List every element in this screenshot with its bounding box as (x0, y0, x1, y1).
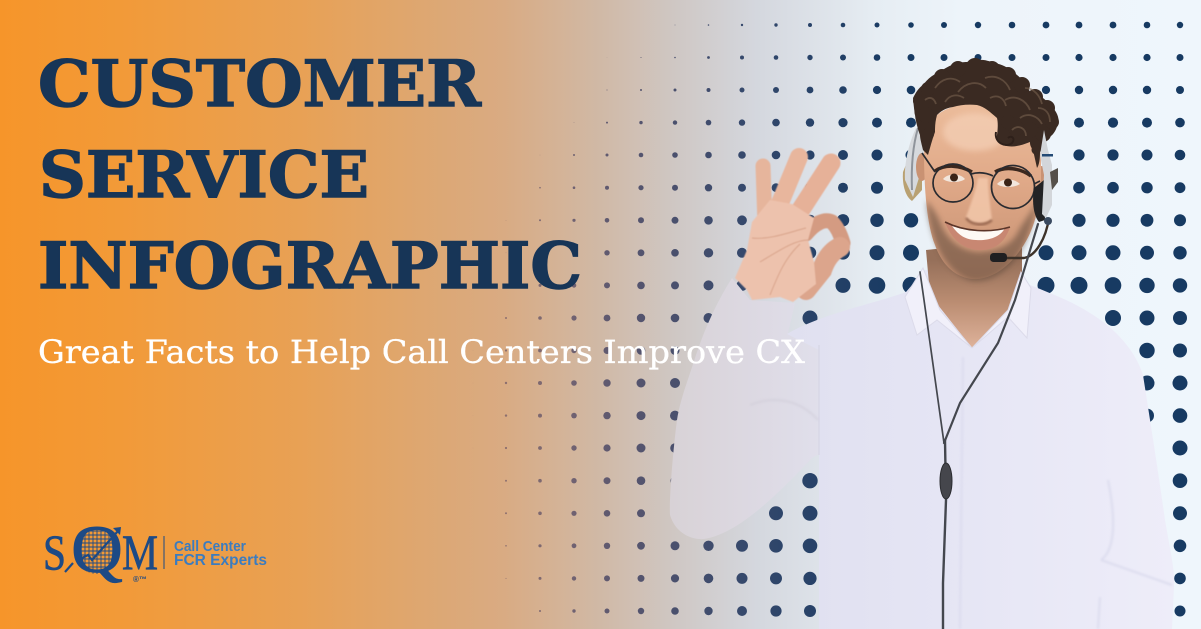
right headset earpiece (1033, 130, 1058, 222)
collar (905, 268, 1031, 348)
logo divider (164, 536, 165, 569)
face (924, 103, 1041, 281)
left headset earpiece (903, 103, 931, 201)
palm (735, 200, 816, 302)
shirt torso (750, 270, 1174, 629)
logo globe grid (82, 530, 112, 574)
logo letters: M (122, 524, 158, 580)
glasses (922, 153, 1040, 208)
person: call center agent with headset (670, 58, 1174, 629)
logo letters: S (43, 524, 66, 580)
logo tagline: FCR Experts (174, 552, 267, 569)
title (38, 47, 582, 304)
logo tagline (174, 538, 267, 569)
headset cable (920, 224, 1038, 629)
palm creases (752, 228, 808, 295)
neck (926, 240, 1022, 348)
ears (916, 153, 1047, 186)
logo: SQM Call Center FCR Experts (46, 526, 266, 584)
logo arrow (65, 527, 121, 572)
microphone boom (990, 217, 1052, 262)
halftone dot pattern (473, 22, 1188, 617)
logo tagline: Call Center (174, 538, 246, 555)
smile (945, 222, 1010, 250)
logo letters (43, 511, 158, 587)
title: CUSTOMER (38, 47, 482, 122)
curly hair (913, 58, 1059, 168)
eyes and eyebrows (935, 166, 1031, 187)
fingers (763, 157, 843, 290)
logo letters: Q (71, 511, 123, 587)
title: INFOGRAPHIC (38, 229, 582, 304)
OK hand gesture (735, 157, 843, 302)
title: SERVICE (39, 138, 369, 213)
raised shirt sleeve (670, 278, 821, 539)
subtitle: Great Facts to Help Call Centers Improve CX (38, 333, 805, 371)
logo trademark: ®™ (133, 575, 147, 584)
